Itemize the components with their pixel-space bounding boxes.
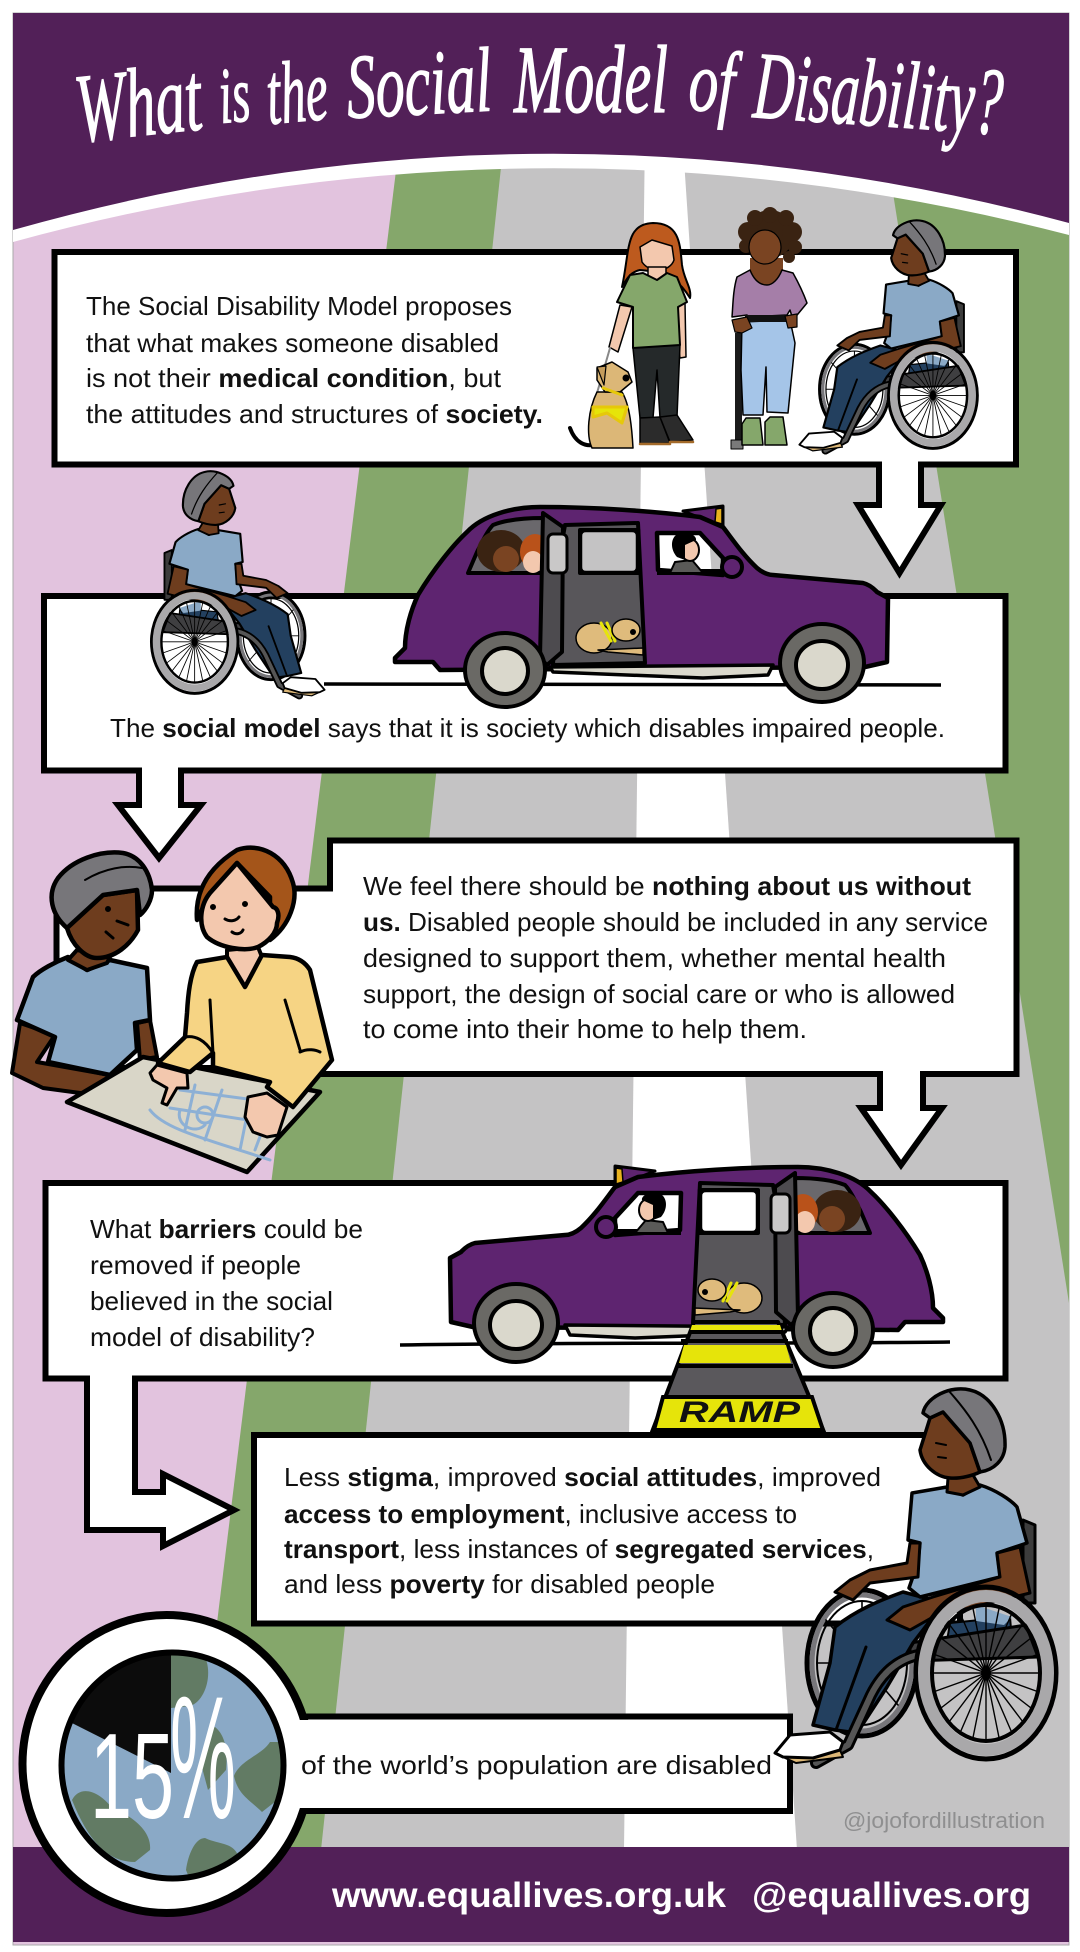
person: large wheelchair user	[775, 1389, 1056, 1763]
title: What	[70, 43, 208, 164]
icon: guide dog	[570, 348, 633, 448]
nothing about us text	[363, 871, 988, 1044]
barriers text: believed in the social	[90, 1286, 333, 1316]
icon: map	[67, 1057, 320, 1172]
outcomes text: Less stigma, improved social attitudes, improved	[284, 1462, 881, 1492]
panel: statistic box	[290, 1716, 790, 1811]
panel: nothing about us box with arrow	[56, 840, 1016, 1165]
nothing about us text: us. Disabled people should be included in any service	[363, 907, 988, 937]
person: woman with cane	[731, 207, 807, 449]
outcomes text: access to employment, inclusive access to	[284, 1499, 797, 1529]
globe pie chart: %	[170, 1661, 236, 1856]
intro text: that what makes someone disabled	[86, 328, 499, 358]
social model text: The social model says that it is society which disables impaired people.	[110, 713, 945, 743]
globe pie chart	[60, 1648, 290, 1880]
nothing about us text: to come into their home to help them.	[363, 1014, 807, 1044]
title: the	[262, 42, 332, 144]
person: man in blue shirt	[12, 852, 157, 1107]
footer bar	[13, 1847, 1069, 1942]
panel: barriers box with elbow arrow	[46, 1183, 1006, 1546]
panel: outcomes box	[254, 1435, 960, 1624]
title: Model	[513, 26, 668, 133]
title	[70, 26, 1006, 164]
illustration: taxi with ramp	[400, 1166, 950, 1432]
title: of	[687, 33, 744, 131]
illustration: three disabled people group	[570, 207, 977, 451]
illustration: taxi side view with open door	[324, 506, 941, 707]
icon: ramp	[652, 1322, 824, 1432]
watermark: @jojofordillustration	[843, 1808, 1045, 1833]
person: wheelchair user	[799, 220, 977, 451]
person: woman in yellow jumper	[150, 848, 332, 1137]
person: woman with guide dog	[570, 223, 693, 448]
barriers text: model of disability?	[90, 1322, 315, 1352]
intro text	[86, 291, 543, 429]
footer handle: @equallives.org	[752, 1876, 1031, 1915]
outcomes text: and less poverty for disabled people	[284, 1569, 715, 1599]
15 percent: 15	[90, 1708, 174, 1844]
person: wheelchair user beside taxi	[152, 471, 325, 696]
statistic text: of the world’s population are disabled	[301, 1750, 772, 1780]
panel: intro box with arrow	[54, 252, 1016, 573]
title: Social	[344, 29, 494, 138]
panel: social model box with arrow	[44, 596, 1006, 858]
barriers text	[90, 1214, 363, 1352]
illustration: two people reading a map	[12, 848, 332, 1172]
title: is	[215, 51, 253, 141]
intro text: The Social Disability Model proposes	[86, 291, 512, 321]
intro text: is not their medical condition , but	[86, 363, 502, 393]
outcomes text	[284, 1462, 881, 1599]
nothing about us text: support, the design of social care or who is allowed	[363, 979, 955, 1009]
intro text: the attitudes and structures of society.	[86, 399, 543, 429]
header band	[13, 13, 1069, 242]
nothing about us text: designed to support them, whether mental health	[363, 943, 946, 973]
footer website: www.equallives.org.uk	[331, 1876, 727, 1915]
15 percent	[90, 1661, 236, 1856]
nothing about us text: We feel there should be nothing about us without	[363, 871, 971, 901]
outcomes text: transport, less instances of segregated services,	[284, 1534, 874, 1564]
statistic circle with globe	[22, 1615, 320, 1913]
icon: ramp: RAMP	[679, 1396, 801, 1429]
barriers text: removed if people	[90, 1250, 301, 1280]
barriers text: What barriers could be	[90, 1214, 363, 1244]
